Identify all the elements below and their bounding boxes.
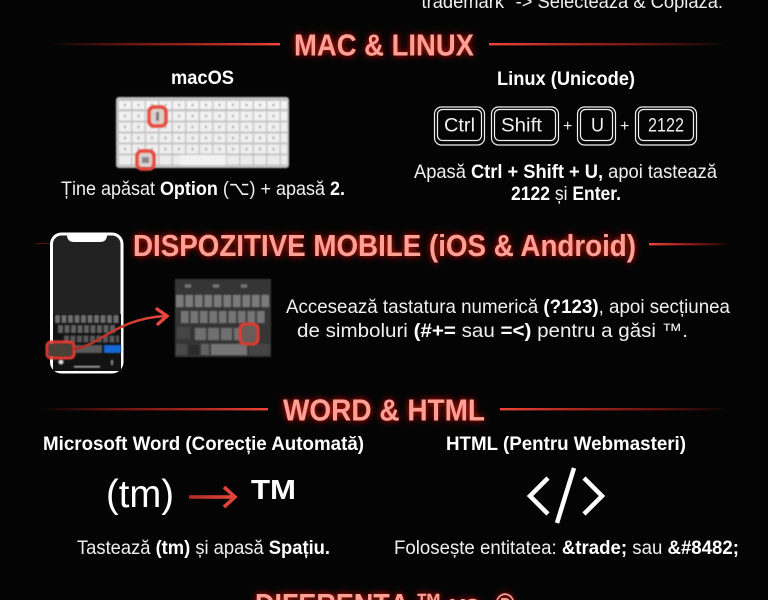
icon: Apple keyboard with highlighted keys — [116, 97, 289, 169]
text: Linux instruction: Apasă Ctrl + Shift + U, apoi tastează — [414, 161, 717, 183]
keys: Ctrl Shift U 2122: + — [620, 118, 629, 135]
subheading: macOS: macOS — [171, 67, 234, 89]
section: mobile devices — [36, 228, 730, 372]
panel: Linux — [414, 68, 717, 205]
heading: Mac & Linux: MAC & LINUX — [294, 28, 474, 62]
text: Word instruction: Tastează (tm) și apasă Spațiu. — [77, 537, 330, 559]
highlight: numeric key — [47, 342, 74, 358]
heading: Word & HTML: WORD & HTML — [283, 392, 485, 428]
icon: phone with keyboard — [47, 234, 122, 372]
keys: Ctrl Shift U 2122: 2122 — [648, 114, 684, 136]
keys: Ctrl Shift U 2122: Ctrl — [444, 114, 475, 136]
panel: macOS — [61, 67, 345, 200]
keys: Ctrl Shift U 2122: U — [591, 114, 604, 136]
section: Mac & Linux — [50, 28, 727, 205]
text: Linux instruction: 2122 și Enter. — [511, 183, 621, 205]
text: mobile instruction: de simboluri (#+= sau =<) pentru a găsi ™. — [297, 320, 688, 342]
text: Linux instruction — [414, 161, 717, 205]
icon: symbols keyboard — [175, 279, 271, 357]
subheading: HTML: HTML (Pentru Webmasteri) — [446, 433, 686, 455]
panel: Microsoft Word — [43, 433, 364, 559]
text: mobile instruction: Accesează tastatura numerică (?123), apoi secțiunea — [286, 296, 730, 318]
arrow: phone to keyboard — [75, 309, 167, 349]
symbol: trademark: TM — [251, 474, 296, 505]
text: mobile instruction — [286, 296, 730, 342]
keys: Ctrl Shift U 2122 — [434, 107, 696, 145]
panel: HTML — [394, 433, 739, 559]
highlight: symbols key — [240, 324, 258, 344]
keys: Ctrl Shift U 2122: Shift — [501, 114, 543, 136]
arrow: autocorrect — [189, 487, 235, 507]
text: HTML instruction: Folosește entitatea: &trade; sau &#8482; — [394, 537, 739, 559]
icon: code brackets — [530, 468, 602, 523]
subheading: Microsoft Word: Microsoft Word (Corecție Automată) — [43, 433, 364, 455]
text: (tm): (tm) — [106, 473, 174, 516]
section: Word & HTML — [40, 392, 739, 559]
subheading: Linux (Unicode): Linux (Unicode) — [497, 68, 635, 90]
text: macOS instruction: Ține apăsat Option (⌥) + apasă 2. — [61, 178, 345, 200]
heading: Dispozitive mobile: DISPOZITIVE MOBILE (iOS & Android) — [133, 228, 636, 263]
keys: Ctrl Shift U 2122: + — [563, 118, 572, 135]
